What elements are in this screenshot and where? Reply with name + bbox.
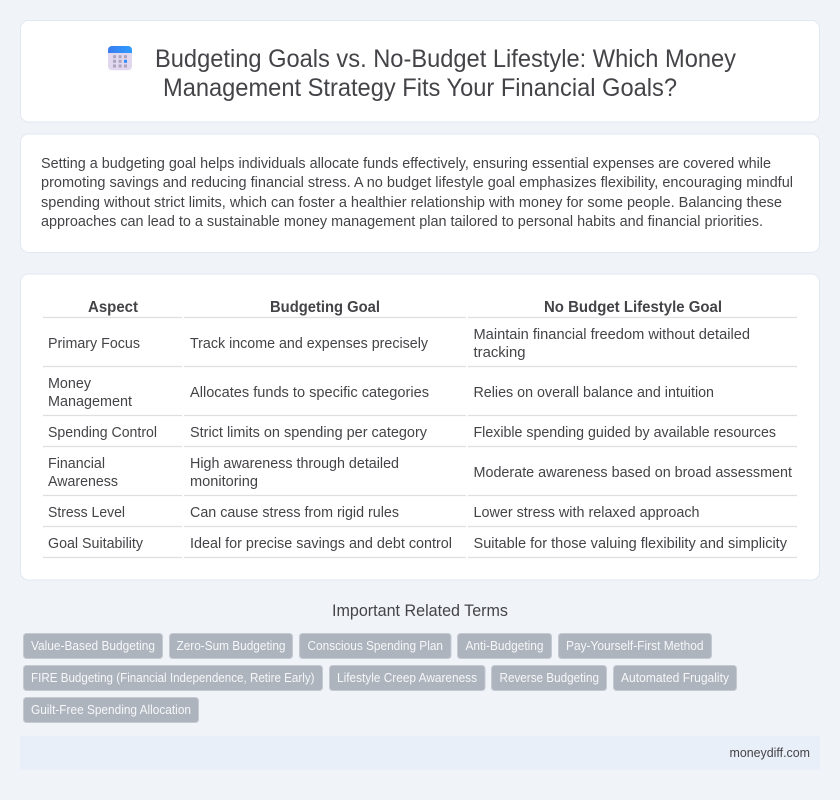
row: primary focus: Track income and expenses precisely bbox=[190, 336, 429, 352]
row: goal suitability: Goal Suitability bbox=[48, 536, 144, 552]
row: primary focus: Primary Focus bbox=[48, 336, 140, 352]
row: goal suitability bbox=[48, 536, 788, 552]
footer: moneydiff.com bbox=[730, 745, 810, 760]
row: money management: Management bbox=[48, 394, 132, 410]
tag bbox=[330, 666, 485, 690]
panel: introduction bbox=[20, 134, 820, 252]
row: stress level bbox=[48, 505, 700, 521]
title: Budgeting Goals vs. No-Budget Lifestyle: Which Money bbox=[155, 45, 736, 73]
tag list: related terms bbox=[24, 634, 736, 722]
footer bbox=[20, 736, 820, 770]
row: goal suitability: Suitable for those valuing flexibility and simplicity bbox=[474, 536, 788, 552]
row: primary focus bbox=[48, 327, 750, 361]
tag: Zero-Sum Budgeting bbox=[176, 639, 286, 653]
tag: Guilt-Free Spending Allocation bbox=[31, 703, 191, 717]
tag bbox=[300, 634, 451, 658]
row: spending control: Strict limits on spending per category bbox=[190, 425, 428, 441]
row: spending control: Spending Control bbox=[48, 425, 157, 441]
tag: Value-Based Budgeting bbox=[31, 639, 155, 653]
title: Management Strategy Fits Your Financial Goals? bbox=[163, 74, 677, 102]
text block: introduction paragraph: Setting a budgeting goal helps individuals allocate funds effectively, ensuring essential expenses are covered while bbox=[41, 156, 771, 172]
text block: introduction paragraph bbox=[41, 156, 793, 230]
row: stress level: Lower stress with relaxed approach bbox=[474, 505, 700, 521]
table header: No Budget Lifestyle Goal bbox=[544, 299, 722, 316]
row: money management: Money bbox=[48, 376, 92, 392]
heading: related terms: Important Related Terms bbox=[332, 602, 508, 620]
row: financial awareness: High awareness through detailed bbox=[190, 456, 399, 472]
row: financial awareness: Financial bbox=[48, 456, 105, 472]
tag: Anti-Budgeting bbox=[466, 639, 544, 653]
row: stress level: Can cause stress from rigid rules bbox=[190, 505, 399, 521]
icon: calendar bbox=[108, 46, 132, 70]
row: stress level: Stress Level bbox=[48, 505, 125, 521]
row: goal suitability: Ideal for precise savings and debt control bbox=[190, 536, 452, 552]
text block: introduction paragraph: approaches can lead to a sustainable money management plan tailored to personal habits and financial priorities. bbox=[41, 214, 763, 230]
table header: Budgeting Goal bbox=[270, 299, 380, 316]
tag bbox=[458, 634, 552, 658]
row: financial awareness: Moderate awareness based on broad assessment bbox=[474, 465, 792, 481]
tag bbox=[614, 666, 736, 690]
row: spending control: Flexible spending guided by available resources bbox=[474, 425, 776, 441]
table header bbox=[88, 299, 722, 316]
table header: Aspect bbox=[88, 299, 139, 316]
tag bbox=[24, 698, 198, 722]
text block: introduction paragraph: spending without strict limits, which can foster a healthier relationship with money for some people. Balancing these bbox=[41, 195, 782, 211]
row: money management: Allocates funds to specific categories bbox=[190, 385, 429, 401]
row: spending control bbox=[48, 425, 776, 441]
tag bbox=[24, 634, 162, 658]
tag bbox=[24, 666, 322, 690]
tag: Pay-Yourself-First Method bbox=[566, 639, 704, 653]
tag: Lifestyle Creep Awareness bbox=[337, 671, 477, 685]
text block: introduction paragraph: promoting savings and reducing financial stress. A no budget lifestyle goal emphasizes flexibility, encouraging mindful bbox=[41, 175, 793, 191]
title bbox=[155, 45, 736, 102]
tag bbox=[170, 634, 292, 658]
row: primary focus: Maintain financial freedom without detailed bbox=[474, 327, 750, 343]
row: financial awareness: Awareness bbox=[48, 474, 118, 490]
panel: title card bbox=[20, 20, 820, 122]
tag bbox=[558, 634, 712, 658]
row: money management: Relies on overall balance and intuition bbox=[474, 385, 714, 401]
tag: Reverse Budgeting bbox=[500, 671, 599, 685]
row: primary focus: tracking bbox=[474, 345, 526, 361]
tag: Conscious Spending Plan bbox=[308, 639, 443, 653]
tag bbox=[492, 666, 606, 690]
tag: FIRE Budgeting (Financial Independence, Retire Early) bbox=[31, 671, 314, 685]
panel: comparison table bbox=[20, 274, 820, 580]
tag: Automated Frugality bbox=[621, 671, 730, 685]
row: financial awareness: monitoring bbox=[190, 474, 258, 490]
row: money management bbox=[48, 376, 714, 410]
row: financial awareness bbox=[48, 456, 792, 490]
